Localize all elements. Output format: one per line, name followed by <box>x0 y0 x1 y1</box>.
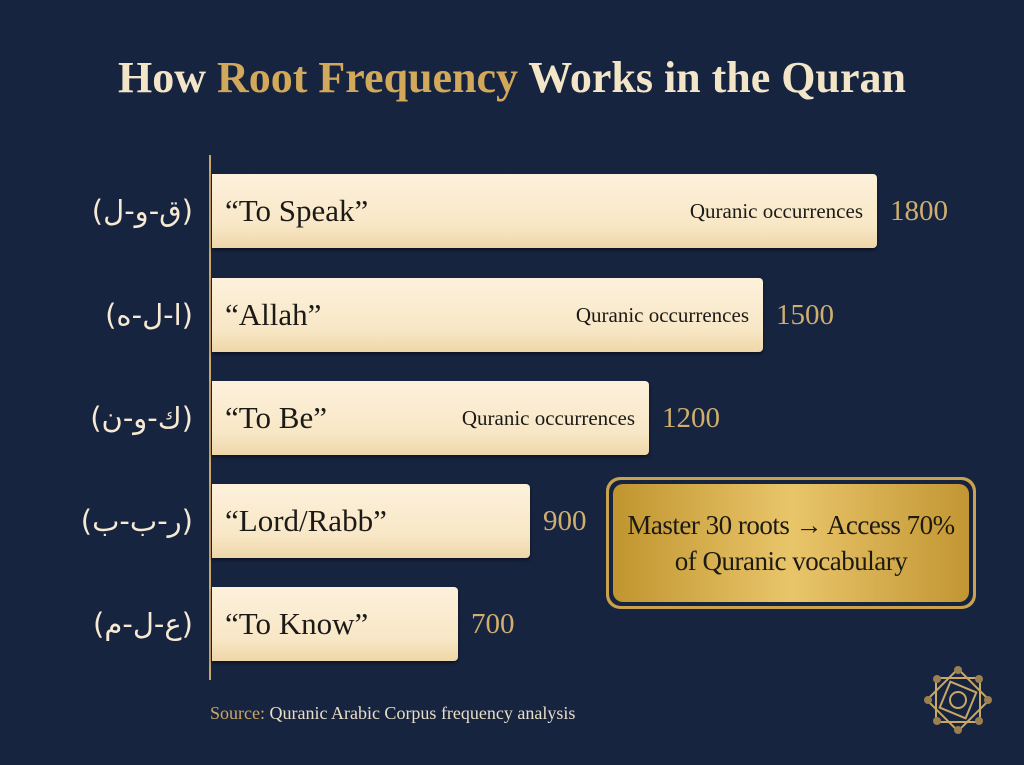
row: allah: ا <box>174 298 182 332</box>
row: to speak: ق <box>159 194 182 228</box>
callout: master 30 roots: Master 30 roots → Access 70% <box>627 510 955 540</box>
row: allah: ) <box>182 298 193 332</box>
row: to speak: ل <box>103 194 124 228</box>
row: to know: م <box>104 607 122 641</box>
row: allah: Quranic occurrences <box>576 303 749 327</box>
row: lord: “Lord/Rabb” <box>225 503 387 538</box>
row: to know: “To Know” <box>225 606 368 641</box>
row: lord: ) <box>182 504 193 538</box>
row: to be: - <box>123 401 133 435</box>
row: to speak: و <box>135 194 149 228</box>
row: to know: - <box>122 607 133 641</box>
row: lord: ب <box>130 504 157 538</box>
row: allah: ل <box>142 298 163 332</box>
axis line <box>209 155 211 680</box>
callout: master 30 roots: of Quranic vocabulary <box>675 546 907 576</box>
icon: geometric star ornament <box>924 666 992 734</box>
row: to speak: 1800 <box>890 195 948 227</box>
row: lord: - <box>119 504 130 538</box>
row: to speak: - <box>124 194 135 228</box>
row: lord: 900 <box>543 505 586 537</box>
row: allah <box>105 278 834 355</box>
row: lord: ( <box>81 504 92 538</box>
row: lord <box>81 484 586 561</box>
row: allah: - <box>132 298 142 332</box>
row: to know: ) <box>182 607 193 641</box>
source note: Source: Quranic Arabic Corpus frequency analysis <box>210 703 575 723</box>
row: allah: 1500 <box>776 299 834 331</box>
row: to be: “To Be” <box>225 400 327 435</box>
row: to be: ) <box>182 401 193 435</box>
row: to speak: ) <box>182 194 193 228</box>
row: to know <box>93 587 514 664</box>
row: to be: - <box>147 401 158 435</box>
row: allah: ( <box>105 298 116 332</box>
row: to be: ك <box>158 401 182 435</box>
row: to be: ( <box>90 401 102 435</box>
row: to speak <box>92 174 948 251</box>
row: to be: و <box>133 401 147 435</box>
row: to be: ن <box>102 401 123 435</box>
row: to be <box>90 381 720 458</box>
row: lord: ر <box>168 504 182 538</box>
row: lord: - <box>157 504 168 538</box>
row: to know: ( <box>93 607 104 641</box>
row: to speak: “To Speak” <box>225 193 368 228</box>
row: to know: - <box>154 607 164 641</box>
row: to know: ع <box>164 607 182 641</box>
row: lord: ب <box>92 504 119 538</box>
row: to speak: ( <box>92 194 103 228</box>
row: to be: Quranic occurrences <box>462 406 635 430</box>
row: allah: - <box>163 298 174 332</box>
row: to know: ل <box>133 607 154 641</box>
row: allah: ه <box>116 298 132 332</box>
row: to know: 700 <box>471 608 514 640</box>
row: to be: 1200 <box>662 402 720 434</box>
title: How Root Frequency Works in the Quran <box>118 53 906 102</box>
row: allah: “Allah” <box>225 297 321 332</box>
callout: master 30 roots <box>606 477 976 609</box>
row: to speak: - <box>149 194 159 228</box>
row: to speak: Quranic occurrences <box>690 199 863 223</box>
